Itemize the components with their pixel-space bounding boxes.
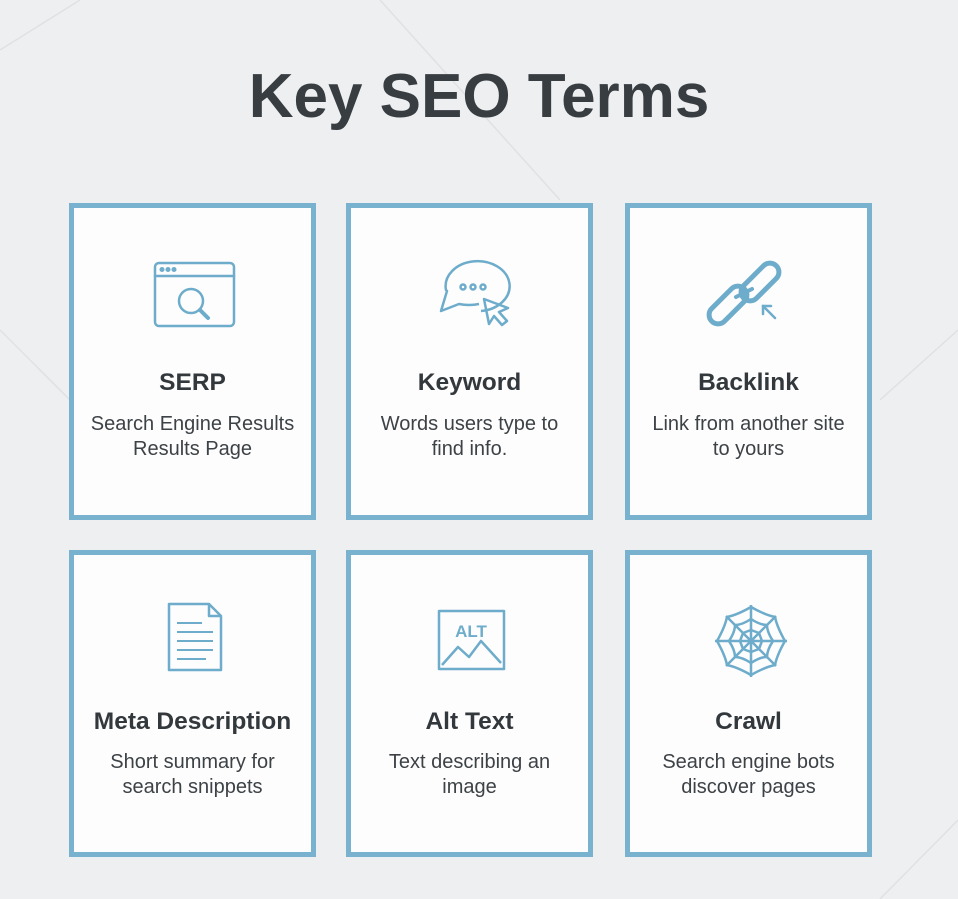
description: Words users type to	[381, 413, 558, 435]
card: Alt Text	[346, 550, 593, 857]
description: find info.	[432, 438, 507, 460]
heading: Alt Text	[425, 708, 514, 735]
heading: Backlink	[698, 369, 799, 396]
description	[662, 751, 835, 798]
description: discover pages	[681, 776, 816, 798]
icon: ALT image	[438, 610, 506, 670]
card: SERP	[69, 203, 316, 520]
icon: spider web	[715, 605, 787, 677]
description	[91, 413, 294, 460]
title: Key SEO Terms	[249, 62, 709, 131]
description: search snippets	[122, 776, 263, 798]
icon: browser search	[154, 262, 236, 328]
heading: SERP	[159, 369, 226, 396]
description: to yours	[713, 438, 784, 460]
description: Search Engine Results	[91, 413, 294, 435]
description: Results Page	[133, 438, 252, 460]
description: Search engine bots	[662, 751, 835, 773]
card: Keyword	[346, 203, 593, 520]
heading: Keyword	[418, 369, 521, 396]
description	[380, 413, 558, 460]
description: Text describing an	[389, 751, 550, 773]
icon: speech bubble with cursor	[440, 260, 511, 326]
card: Backlink	[625, 203, 872, 520]
description	[389, 751, 550, 798]
heading: Meta Description	[94, 708, 291, 735]
icon: chain link	[706, 260, 782, 326]
card: Crawl	[625, 550, 872, 857]
heading: Crawl	[715, 708, 782, 735]
description	[110, 751, 275, 798]
description	[652, 413, 845, 460]
icon: ALT image: ALT	[455, 622, 488, 641]
description: Link from another site	[652, 413, 845, 435]
icon: document	[168, 602, 222, 672]
description: image	[442, 776, 497, 798]
card: Meta Description	[69, 550, 316, 857]
description: Short summary for	[110, 751, 275, 773]
